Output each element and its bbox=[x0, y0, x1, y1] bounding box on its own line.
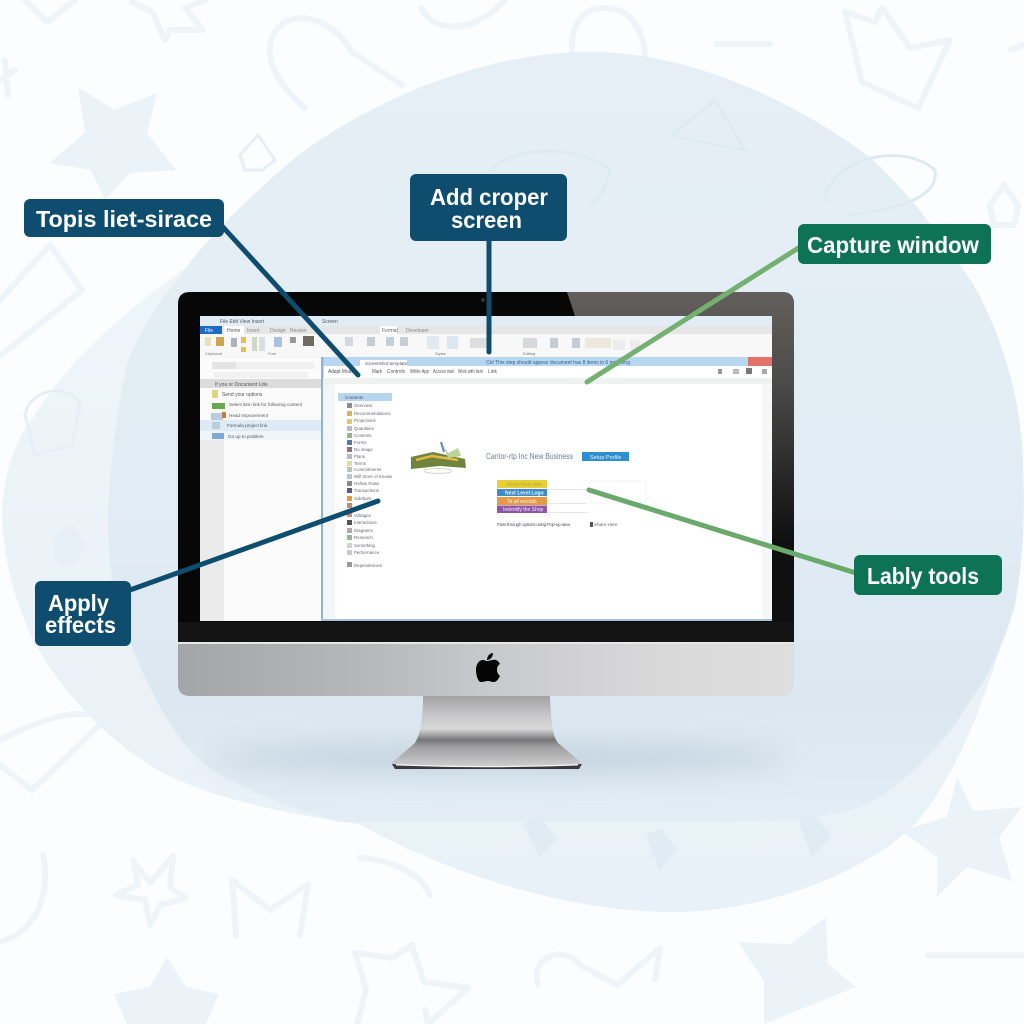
silver chin bbox=[178, 640, 794, 696]
ribbon tabs: Design bbox=[270, 328, 286, 334]
connector: lably bbox=[589, 490, 856, 573]
side navigation list: Quantities bbox=[354, 426, 375, 431]
main window: White App bbox=[410, 369, 429, 375]
side navigation list: Contents bbox=[345, 395, 364, 400]
side navigation list: Overview bbox=[354, 403, 373, 408]
camera bbox=[481, 298, 485, 302]
label: lably: Lably tools bbox=[867, 563, 979, 589]
main window: Link bbox=[488, 369, 497, 375]
label: topics: Topis liet-sirace bbox=[36, 206, 212, 232]
connector: add croper bbox=[486, 240, 492, 352]
monitor bbox=[178, 292, 794, 769]
ribbon tabs bbox=[200, 326, 772, 334]
side navigation list: Transactions bbox=[354, 488, 380, 493]
small note: Pass through options using Pop-up area bbox=[497, 522, 570, 527]
apple logo bbox=[476, 653, 500, 682]
side navigation list: Sidebars bbox=[354, 496, 372, 501]
small note: Share Here bbox=[594, 522, 618, 527]
left task pane bbox=[200, 358, 322, 621]
main window: Ctrl This step should appear document has 8 items in 6 matching bbox=[486, 360, 630, 366]
ribbon: Font bbox=[268, 351, 277, 356]
title bar text: File Edit View Insert bbox=[220, 319, 265, 325]
side navigation list: Diagrams bbox=[354, 528, 374, 533]
label: apply: Apply bbox=[48, 590, 109, 616]
side navigation list: Terms bbox=[354, 461, 367, 466]
side navigation list: Something bbox=[354, 543, 376, 548]
ribbon tabs: Insert bbox=[247, 328, 260, 334]
small note bbox=[497, 522, 618, 527]
decorative icons on backdrop bbox=[25, 100, 935, 868]
ribbon: Clipboard bbox=[205, 351, 222, 356]
main window: Access mail bbox=[433, 369, 454, 375]
main window: Mark bbox=[372, 369, 382, 375]
colored form bars bbox=[497, 480, 646, 513]
ribbon: Styles bbox=[435, 351, 446, 356]
screen bbox=[200, 316, 772, 621]
side navigation list: Research bbox=[354, 535, 373, 540]
title bar bbox=[200, 316, 772, 327]
label: apply bbox=[35, 581, 131, 646]
side navigation list: Plans bbox=[354, 454, 366, 459]
label: add croper bbox=[410, 174, 567, 241]
side navigation list: Contents bbox=[354, 433, 372, 438]
side navigation list: Voltages bbox=[354, 513, 372, 518]
left task pane: Select item link for following content bbox=[229, 402, 303, 407]
chin highlight bbox=[178, 642, 794, 644]
left task pane: Head Improvement bbox=[229, 413, 269, 418]
connector: topics bbox=[222, 226, 358, 375]
main window: Controls bbox=[387, 369, 405, 375]
left task pane: Go up to problem bbox=[228, 434, 264, 439]
colored form bars: Insert New Item bbox=[507, 482, 542, 488]
stand bbox=[392, 696, 582, 769]
colored form bars: Next Level Logo bbox=[505, 490, 544, 496]
black bezel bbox=[178, 292, 794, 642]
side navigation list: Interactions bbox=[354, 520, 378, 525]
main window: Screenshot template bbox=[365, 361, 408, 366]
ribbon tabs: File bbox=[205, 328, 213, 334]
bezel glare bbox=[567, 292, 794, 622]
ribbon tabs: Developer bbox=[406, 328, 429, 334]
colored form bars: To all records bbox=[507, 499, 537, 505]
connector: capture bbox=[587, 247, 800, 382]
label: capture bbox=[798, 224, 991, 264]
monitor shadow bbox=[210, 744, 790, 772]
side navigation list: No image bbox=[354, 447, 373, 452]
side navigation list: Performance bbox=[354, 550, 380, 555]
heading and button: Cantor-rtp Inc New Business bbox=[486, 452, 573, 461]
side navigation list: Hollow Rows bbox=[354, 481, 380, 486]
side navigation list: Dependencies bbox=[354, 563, 383, 568]
left task pane: Formula project link bbox=[227, 423, 268, 428]
side navigation list bbox=[338, 393, 393, 568]
connector: apply bbox=[130, 501, 378, 590]
label: add croper: screen bbox=[451, 207, 522, 233]
left task pane: Send your options bbox=[222, 392, 263, 398]
label: capture: Capture window bbox=[807, 232, 979, 258]
ribbon tabs: Format bbox=[382, 328, 398, 334]
window toolbar: Adapt Mode bbox=[328, 369, 354, 375]
illustration bbox=[411, 442, 466, 474]
ribbon tabs: Review bbox=[290, 328, 307, 334]
screen: Screen bbox=[322, 319, 338, 325]
side navigation list: Projections bbox=[354, 418, 377, 423]
side navigation list: Forms bbox=[354, 440, 367, 445]
label: apply: effects bbox=[45, 612, 116, 638]
ribbon bbox=[200, 334, 772, 358]
label: add croper: Add croper bbox=[430, 184, 548, 210]
colored form bars: Indentify the Shop bbox=[503, 507, 544, 513]
left task pane: If you or Document Link bbox=[215, 382, 268, 388]
label: lably bbox=[854, 555, 1002, 595]
label: topics bbox=[24, 199, 224, 237]
ribbon: Editing bbox=[523, 351, 535, 356]
main window bbox=[321, 357, 772, 621]
heading and button: Setup Profile bbox=[590, 455, 622, 461]
side navigation list: Recommendations bbox=[354, 411, 391, 416]
main window: Work with Item bbox=[458, 369, 483, 375]
ribbon tabs: Home bbox=[227, 328, 241, 334]
side navigation list: Commitments bbox=[354, 467, 382, 472]
side navigation list: Will Store of Knows bbox=[354, 474, 393, 479]
backdrop: inner blue blob bbox=[108, 52, 1024, 822]
